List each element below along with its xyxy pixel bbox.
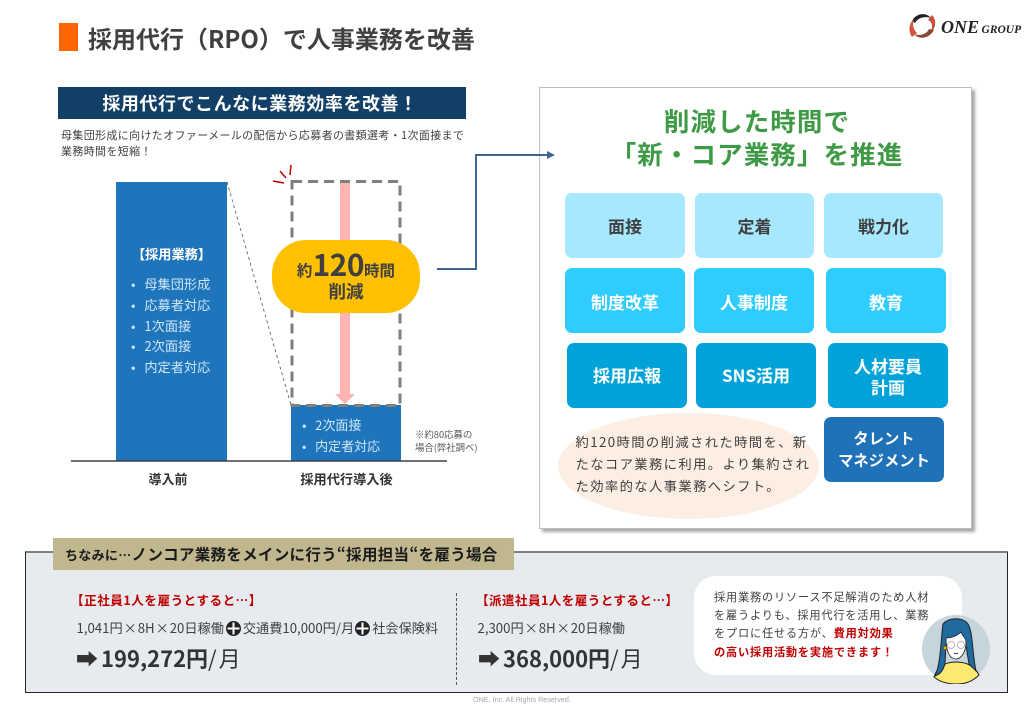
- bar: before introduction: [116, 182, 227, 461]
- bubble text: の高い採用活動を実施できます！: [714, 644, 894, 660]
- note text: たなコア業務に利用。より集約され: [576, 454, 810, 472]
- title accent block: [59, 23, 78, 51]
- panel heading: 「新・コア業務」を推進: [611, 134, 903, 172]
- bar chart: before and after comparison: [71, 164, 478, 488]
- regular employee calculation: 1,041円 × 8H × 20日稼働 交通費10,000円/月 社会保険料: [76, 618, 438, 637]
- bar: after introduction: [291, 405, 401, 461]
- note text: 約120時間の削減された時間を、新: [576, 432, 808, 450]
- note text: [576, 432, 810, 494]
- box: タレントマネジメント: [824, 417, 944, 482]
- callout first line: 約120時間: [297, 241, 395, 285]
- box: 面接: [565, 193, 685, 258]
- box: 人材要員計画: 計画: [871, 374, 905, 398]
- temp employee total: ➡368,000円/ 月: [478, 642, 641, 674]
- arrow: to new core work panel: [437, 151, 555, 270]
- panel: hiring comparison: [25, 551, 1008, 693]
- box: SNS活用: [696, 343, 816, 408]
- bubble text: をプロに任せる方が、費用対効果: [714, 625, 894, 641]
- remaining task list: • 2次面接: [302, 415, 361, 434]
- box: 戦力化: 戦力化: [858, 213, 909, 238]
- intro text: [61, 126, 464, 159]
- x label: before: 導入前: [148, 469, 188, 488]
- footer copyright: ONE, Inc. All Rights Reserved.: [473, 695, 571, 704]
- bubble text: 採用業務のリソース不足解消のため人材: [714, 589, 929, 605]
- task list: • 内定者対応: [131, 357, 210, 376]
- panel heading: [611, 102, 903, 172]
- tan section heading: ちなみに…ノンコア業務をメインに行う“採用担当“を雇う場合: [65, 543, 498, 565]
- speech bubble: [694, 576, 962, 675]
- box: 採用広報: 採用広報: [593, 362, 661, 387]
- box: タレントマネジメント: タレント: [853, 426, 915, 448]
- task list: • 1次面接: [131, 316, 191, 335]
- x label: after: 採用代行導入後: [300, 469, 393, 488]
- task list: • 2次面接: [131, 336, 191, 355]
- icon: woman avatar: [922, 615, 990, 684]
- box: 人材要員計画: 人材要員: [854, 352, 922, 378]
- temp employee calculation: 2,300円 × 8H × 20日稼働: [478, 618, 625, 637]
- box: 人事制度: 人事制度: [720, 289, 788, 314]
- footnote: ※約80応募の: [415, 427, 472, 441]
- divider: [456, 593, 457, 685]
- box: 定着: [695, 193, 814, 258]
- remaining task list: [302, 415, 380, 455]
- box: 人事制度: [694, 268, 814, 333]
- box: SNS活用: SNS活用: [722, 362, 790, 387]
- bubble text: [714, 589, 929, 660]
- banner heading: 採用代行でこんなに業務効率を改善！: [102, 90, 418, 116]
- reduction graphic: dashed outline and arrow: [71, 164, 447, 462]
- box: 教育: 教育: [869, 288, 903, 314]
- regular employee total: ➡199,272円/ 月: [76, 642, 239, 674]
- callout: 120 hours reduced: [272, 240, 420, 313]
- box: タレントマネジメント: マネジメント: [838, 448, 930, 470]
- bubble text: を雇うよりも、採用代行を活用し、業務: [714, 607, 929, 623]
- remaining task list: • 内定者対応: [302, 436, 380, 455]
- intro text: 業務時間を短縮！: [61, 143, 152, 159]
- box: 戦力化: [824, 193, 943, 258]
- title: 採用代行（RPO）で人事業務を改善: [88, 20, 475, 55]
- box: 制度改革: 制度改革: [591, 289, 659, 314]
- ellipse note: [558, 412, 818, 518]
- box: 制度改革: [565, 268, 685, 333]
- tan section heading: [53, 538, 514, 570]
- logo: ONE GROUP: [910, 14, 1022, 38]
- task list: [131, 274, 210, 376]
- logo: ONE GROUP: ONE GROUP: [941, 17, 1021, 37]
- panel: core work: [539, 87, 972, 529]
- callout second line: 削減: [328, 279, 364, 304]
- box: 面接: 面接: [608, 213, 642, 238]
- box: 定着: 定着: [738, 213, 772, 238]
- panel heading: 削減した時間で: [664, 102, 850, 139]
- footnote: [415, 427, 478, 454]
- footnote: 場合(弊社調べ): [415, 440, 478, 454]
- banner background: [58, 87, 466, 119]
- box: 人材要員計画: [828, 343, 948, 408]
- box: 教育: [826, 268, 946, 333]
- task list: • 応募者対応: [131, 295, 210, 314]
- intro text: 母集団形成に向けたオファーメールの配信から応募者の書類選考・1次面接まで: [61, 126, 464, 142]
- bar heading: 【採用業務】: [132, 244, 211, 263]
- box: 採用広報: [567, 343, 687, 408]
- regular employee heading: 【正社員1人を雇うとすると…】: [71, 590, 262, 609]
- note text: た効率的な人事業務へシフト。: [576, 476, 781, 494]
- temp employee heading: 【派遣社員1人を雇うとすると…】: [476, 590, 678, 609]
- task list: • 母集団形成: [131, 274, 210, 293]
